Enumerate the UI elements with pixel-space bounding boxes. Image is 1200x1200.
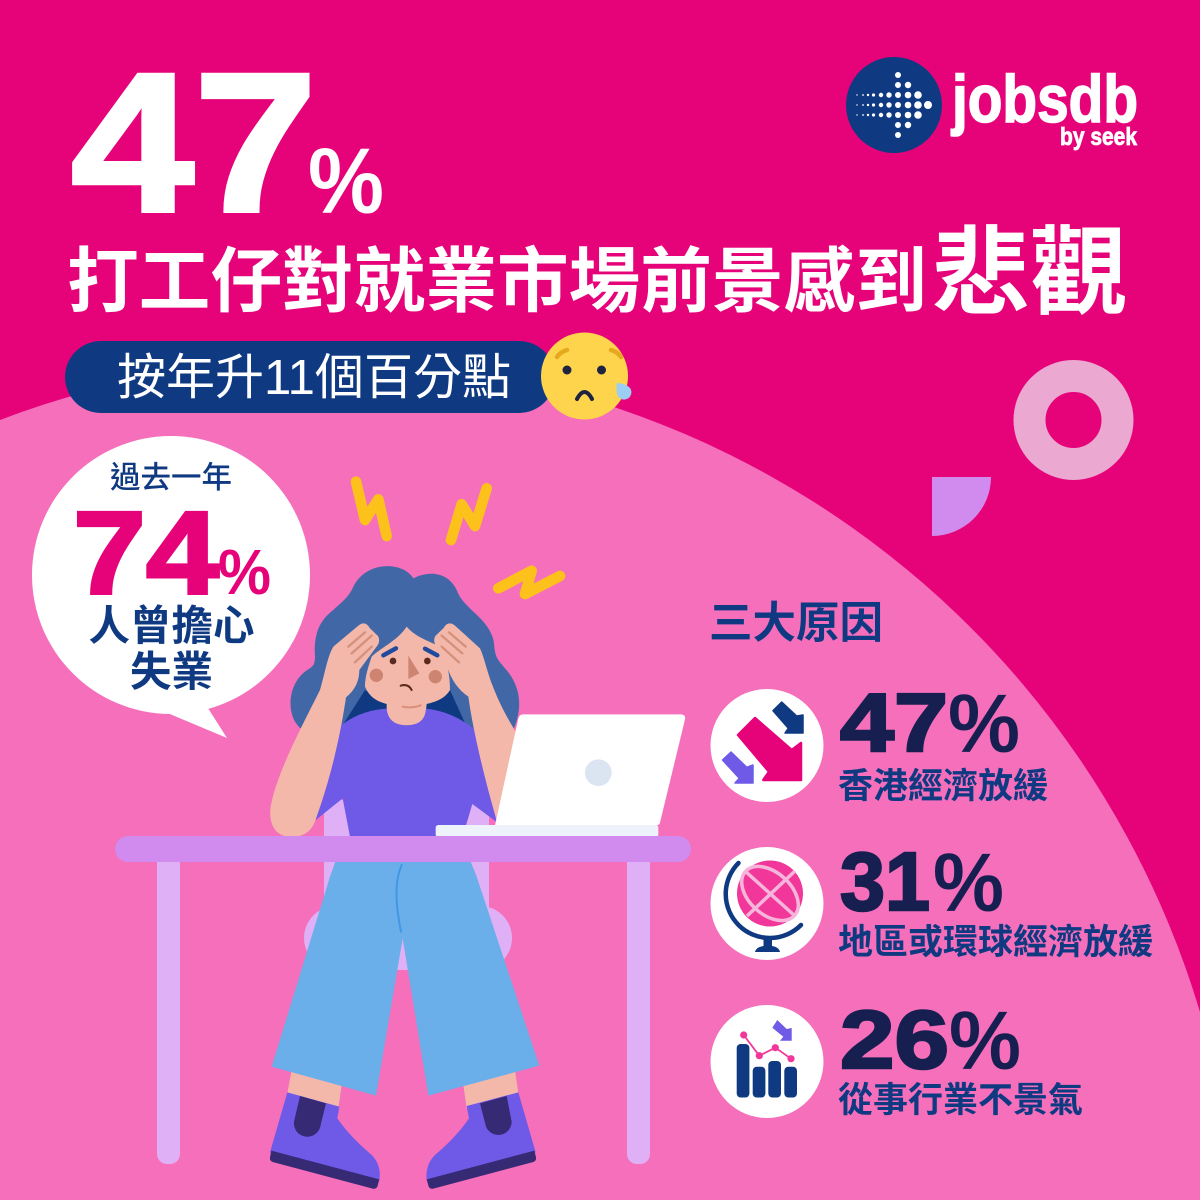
bubble top caption: 過去一年 <box>110 461 232 495</box>
illustration: stressed woman at desk <box>115 482 691 1189</box>
shins and shoes <box>270 1070 536 1189</box>
icon: worried emoji <box>541 332 631 420</box>
bubble bottom caption: 人曾擔心 <box>88 602 255 649</box>
section heading: top three reasons: 三大原因 <box>709 600 883 648</box>
icon: falling arrows <box>710 689 824 802</box>
table top <box>115 836 691 862</box>
headline text: 悲觀 <box>932 220 1128 327</box>
subtitle pill <box>65 341 555 413</box>
bubble shape <box>32 436 310 738</box>
logo wordmark: jobsdb <box>950 62 1138 137</box>
reason 2 label: 地區或環球經濟放緩 <box>838 923 1153 962</box>
table legs <box>157 850 650 1164</box>
icon: declining bar chart <box>710 1005 824 1118</box>
reason 2: regional or global economic slowdown <box>710 835 1153 962</box>
eyebrows <box>383 648 437 655</box>
left arm and hand <box>270 623 379 837</box>
reason 1 percentage: % <box>948 677 1020 770</box>
chair <box>304 800 512 970</box>
logo wordmark: by seek <box>1060 123 1137 151</box>
reason 3 percentage <box>840 993 1021 1087</box>
logo roundel with dotted arrow <box>846 57 942 153</box>
reason 2 percentage: 31 <box>840 835 930 928</box>
right arm and hand <box>434 623 517 820</box>
head, arms and torso <box>270 566 519 837</box>
bubble bottom caption: 失業 <box>130 648 213 695</box>
icon: globe <box>710 847 824 960</box>
reason 1 percentage: 47 <box>840 676 948 769</box>
trousers <box>272 860 539 1096</box>
headline text: 打工仔對就業市場前景感到 <box>67 243 927 322</box>
reason 2 percentage <box>840 835 1004 929</box>
reason 1: Hong Kong economic slowdown <box>710 676 1048 806</box>
cheeks and nose <box>370 656 442 683</box>
reason 1 percentage <box>840 676 1020 770</box>
reason 1 label: 香港經濟放緩 <box>838 767 1048 806</box>
hair <box>291 566 519 733</box>
eyes <box>390 658 431 664</box>
reason 3 percentage: 26 <box>840 993 949 1086</box>
headline statistic 47%: 47 <box>71 32 317 253</box>
headline text <box>67 220 1128 327</box>
decorative quarter circle <box>932 477 991 536</box>
bubble statistic: % <box>218 536 271 608</box>
reason 2 percentage: % <box>933 836 1004 929</box>
subtitle pill: 按年升11個百分點 <box>117 351 511 405</box>
reason 3: industry downturn <box>710 993 1083 1120</box>
face and neck <box>365 627 450 725</box>
logo: jobsdb by seek <box>846 57 1138 153</box>
finger lines <box>348 632 466 662</box>
decorative ring <box>1030 376 1118 464</box>
bubble statistic: 74 <box>73 488 219 620</box>
mouth <box>401 685 412 690</box>
headline statistic 47%: % <box>308 129 384 233</box>
reason 3 percentage: % <box>949 994 1021 1087</box>
bubble bottom caption <box>88 602 255 695</box>
torso in purple shirt <box>315 709 497 837</box>
light pink large curved background <box>0 360 1200 1200</box>
hair shadow behind neck <box>342 690 467 727</box>
speech bubble: 74% worried about unemployment <box>32 436 310 738</box>
bubble statistic <box>73 488 271 620</box>
chin line <box>403 705 421 707</box>
reason 3 label: 從事行業不景氣 <box>838 1081 1083 1120</box>
stress lightning bolts <box>356 482 560 594</box>
laptop <box>436 714 685 837</box>
